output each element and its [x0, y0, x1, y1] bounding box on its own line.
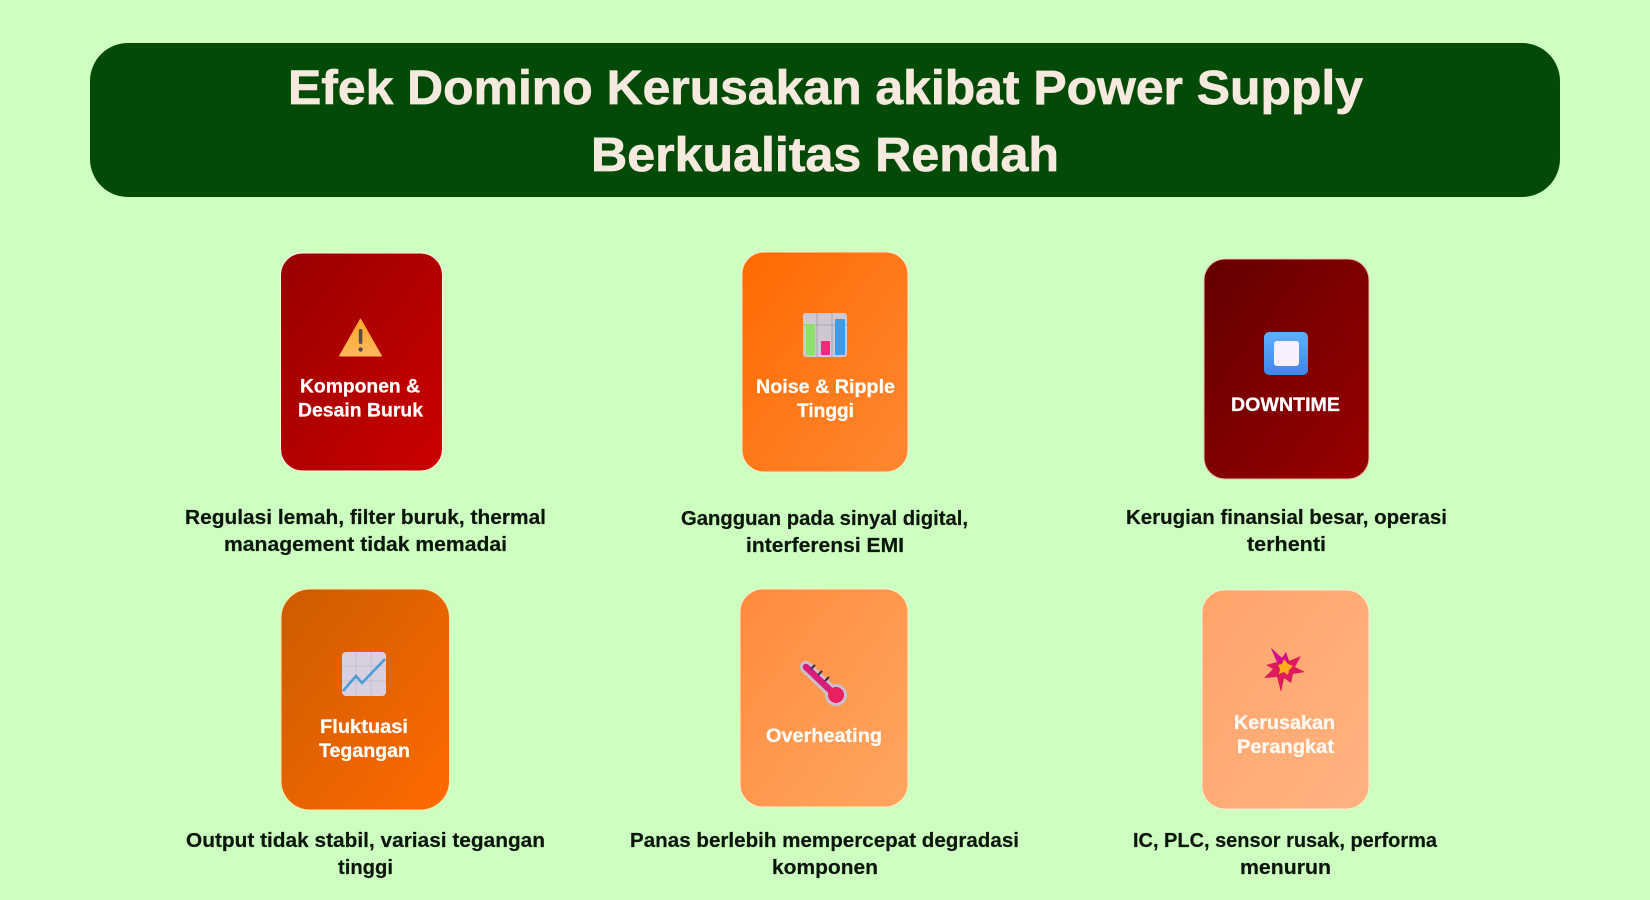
panel: Overheating [740, 589, 908, 807]
panel: Komponen & Desain Buruk [280, 253, 442, 471]
description: Noise & Ripple Tinggi [681, 508, 968, 557]
description: Noise & Ripple Tinggi: Gangguan pada sinyal digital, [681, 508, 968, 530]
icon: rising line chart [342, 652, 386, 696]
panel: Kerusakan Perangkat [1202, 590, 1369, 809]
title banner: Berkualitas Rendah [591, 129, 1059, 182]
icon: collision burst [1264, 648, 1305, 692]
card label: Kerusakan [1234, 713, 1335, 734]
card label: DOWNTIME [1231, 395, 1340, 416]
description: Fluktuasi Tegangan: tinggi [338, 857, 393, 879]
description: Fluktuasi Tegangan [186, 830, 545, 879]
card label: Perangkat [1237, 737, 1335, 758]
card label: Fluktuasi [320, 717, 408, 738]
description: Komponen & Desain Buruk: Regulasi lemah, filter buruk, thermal [185, 507, 546, 529]
icon: thermometer [806, 665, 847, 706]
description: Overheating [630, 830, 1019, 879]
description: DOWNTIME: Kerugian finansial besar, operasi [1126, 507, 1447, 529]
card label: Komponen & [300, 376, 420, 398]
card label: Tinggi [797, 401, 854, 422]
panel: DOWNTIME [1204, 259, 1369, 479]
card label [319, 717, 410, 762]
description: Komponen & Desain Buruk: management tidak memadai [224, 534, 507, 556]
card label: Overheating [766, 726, 882, 747]
icon: stop button [1264, 332, 1308, 375]
title text: Efek Domino Kerusakan akibat Power Supply [288, 62, 1363, 115]
description: Overheating: Panas berlebih mempercepat degradasi [630, 830, 1019, 852]
panel: Fluktuasi Tegangan [281, 589, 450, 810]
description: Komponen & Desain Buruk [185, 507, 546, 556]
card label [298, 376, 423, 422]
description: Fluktuasi Tegangan: Output tidak stabil, variasi tegangan [186, 830, 545, 852]
title banner [90, 43, 1560, 197]
description: Kerusakan Perangkat: menurun [1240, 857, 1331, 879]
card label [1234, 713, 1335, 758]
description: Overheating: komponen [772, 857, 878, 879]
card label: Tegangan [319, 741, 410, 762]
panel: Noise & Ripple Tinggi [742, 252, 908, 472]
description: Kerusakan Perangkat [1133, 830, 1438, 879]
description: DOWNTIME: terhenti [1247, 534, 1326, 556]
description: Noise & Ripple Tinggi: interferensi EMI [746, 535, 904, 557]
description: DOWNTIME [1126, 507, 1447, 556]
card label [756, 377, 895, 422]
icon: warning [340, 319, 382, 356]
icon: bar chart [803, 313, 847, 357]
card label: Desain Buruk [298, 400, 423, 422]
card label: Noise & Ripple [756, 377, 895, 398]
description: Kerusakan Perangkat: IC, PLC, sensor rusak, performa [1133, 830, 1438, 852]
